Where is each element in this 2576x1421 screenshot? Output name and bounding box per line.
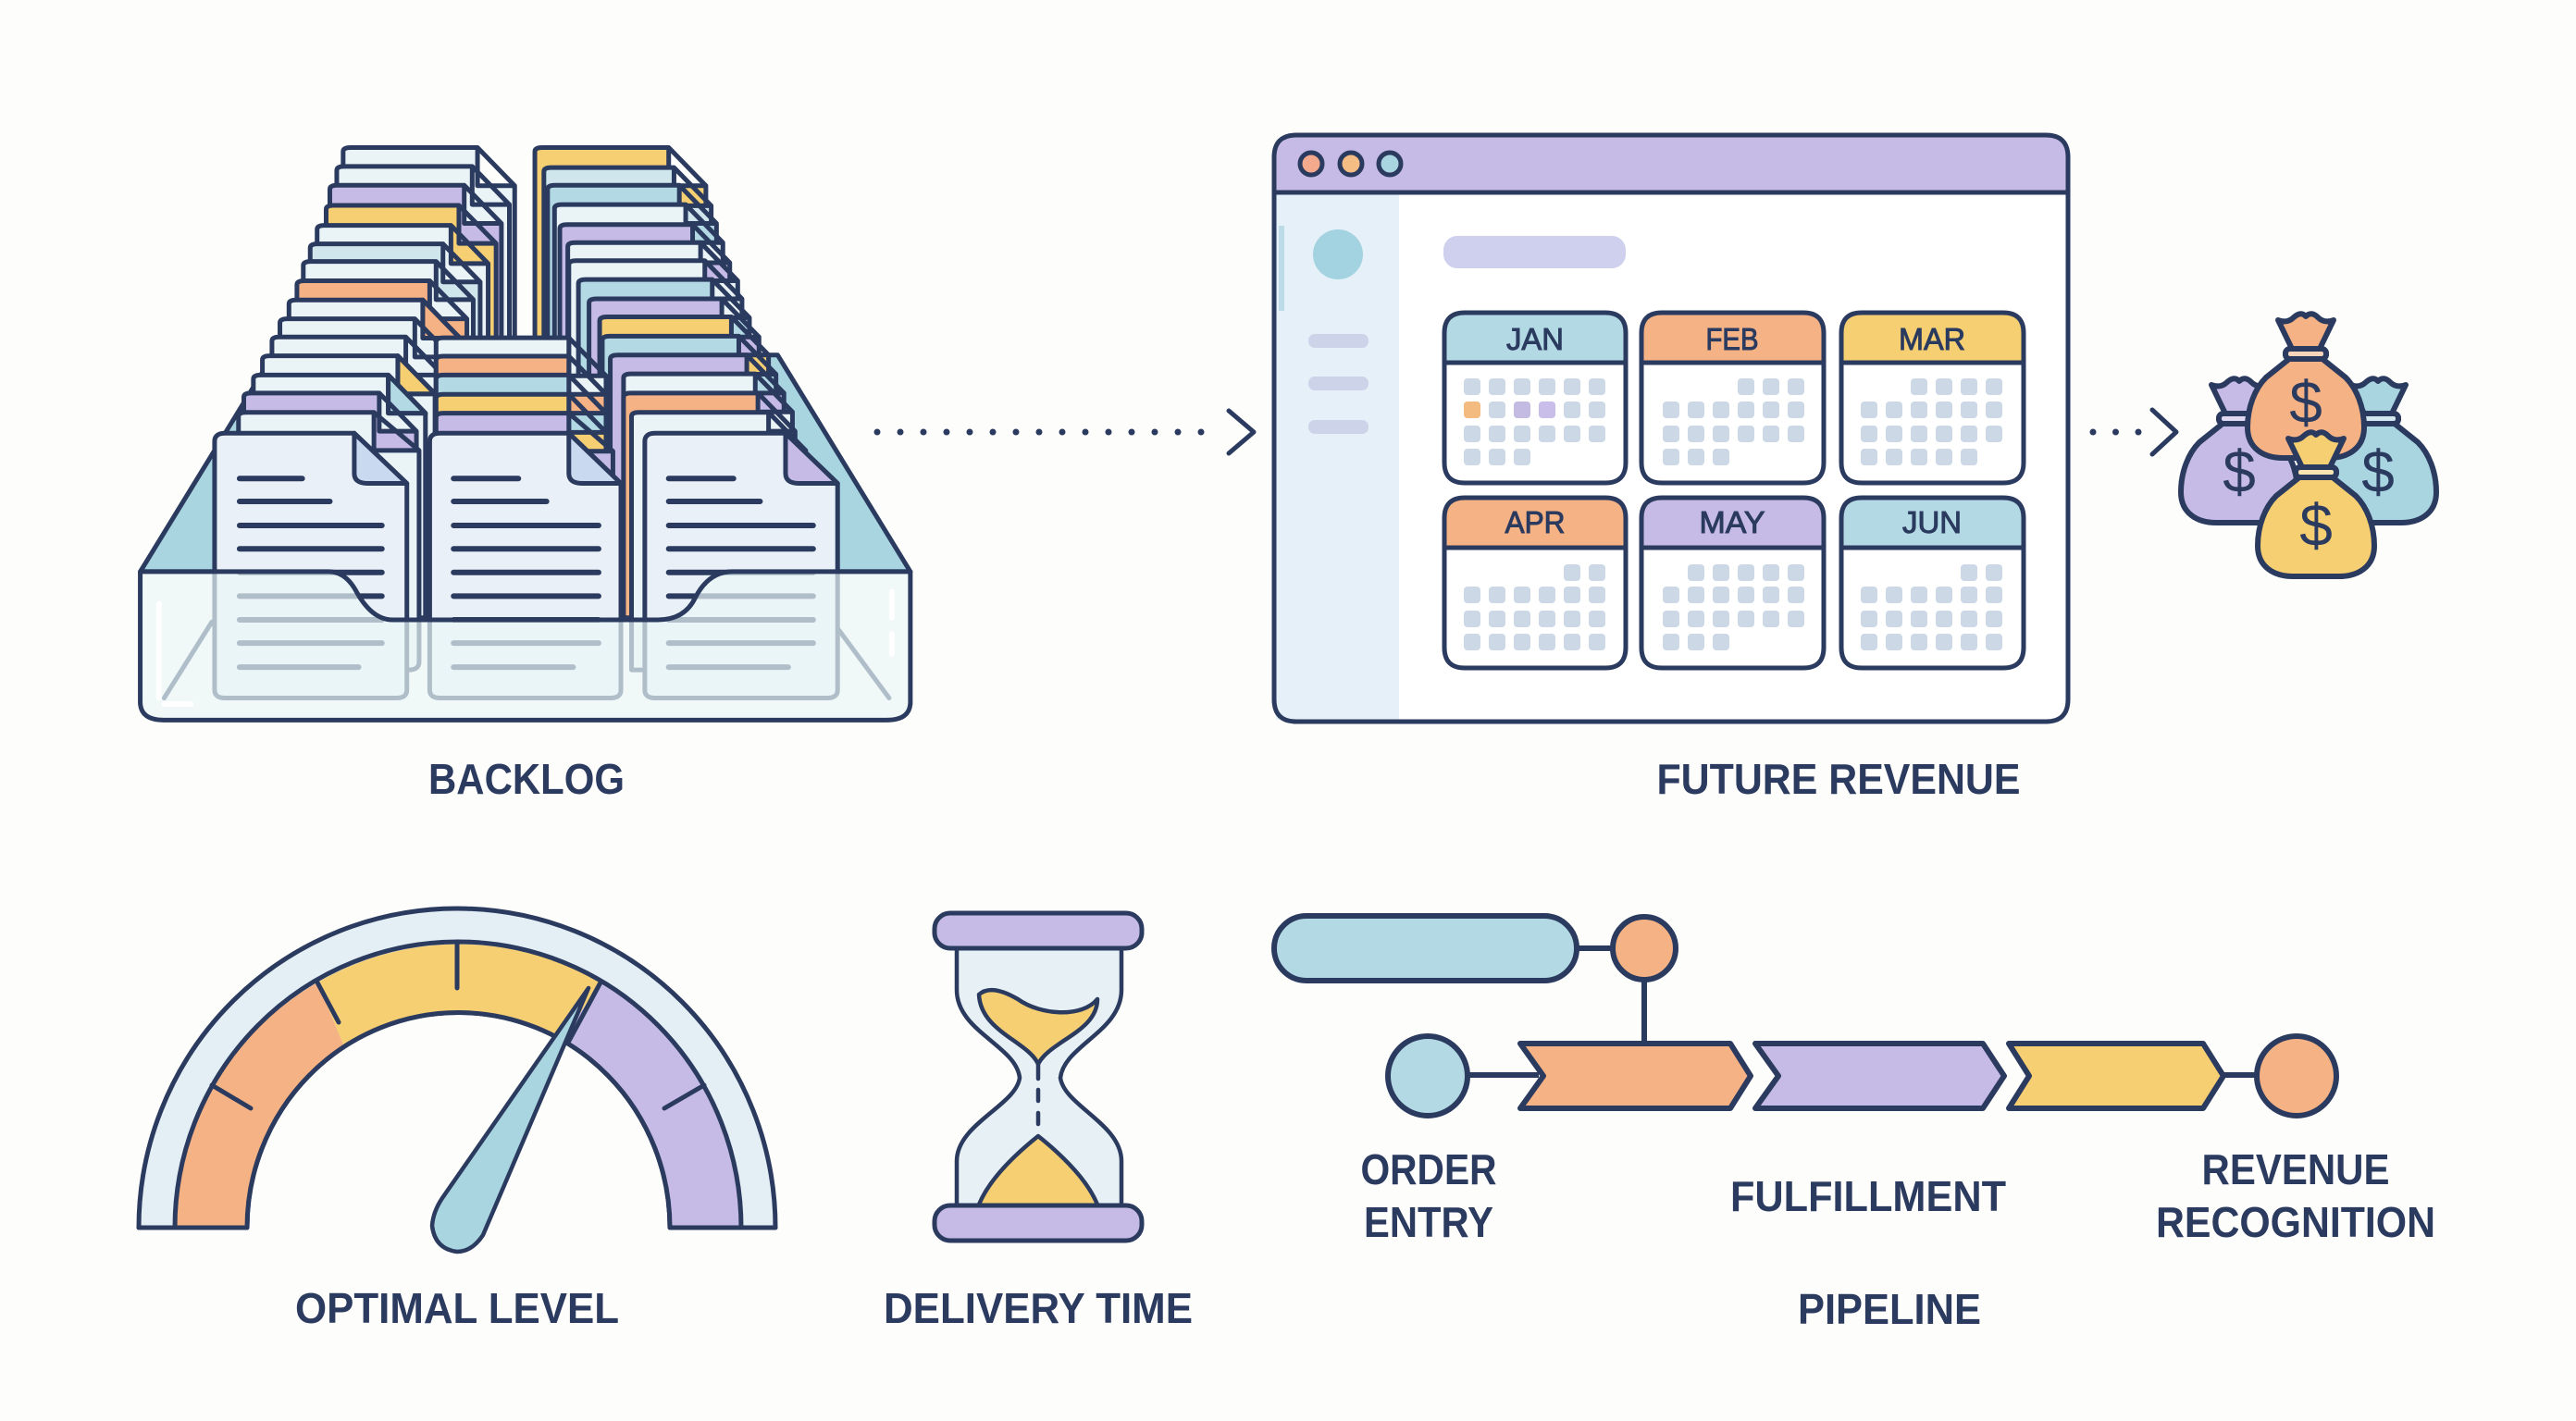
panel: backlog tray with document files [141,147,910,720]
gauge segment: purple [562,982,741,1228]
bag: orange: $ [2289,369,2322,436]
chevron: purple [1755,1044,2004,1108]
arrow: revenue to money bags [2093,410,2176,454]
bag: yellow [2258,432,2374,576]
window controls [1300,153,1401,175]
sidebar [1276,192,1399,720]
calendar: APR: APR [1505,505,1566,539]
document: left [215,433,407,698]
gauge segment: yellow [317,945,601,1046]
inner tray floor lines [164,622,889,698]
bottom cap [935,1205,1142,1241]
label: delivery time: DELIVERY TIME [884,1284,1193,1332]
bottom sand [979,1136,1097,1205]
falling sand [979,1064,1097,1205]
label: revenue: REVENUE [2202,1145,2389,1193]
chevron: orange [1520,1044,1751,1108]
window body [1274,135,2068,722]
document: middle [429,433,621,698]
top node [1613,917,1676,980]
label: optimal level: OPTIMAL LEVEL [295,1284,619,1332]
bag: purple [2181,378,2297,523]
middle file stack [436,338,613,618]
bag: purple: $ [2223,439,2256,505]
label: future revenue: FUTURE REVENUE [1656,755,2021,803]
connectors [1467,948,2256,1075]
diagram: pipeline flow [1274,916,2336,1116]
label: order entry: ORDER [1360,1145,1497,1193]
calendar: JAN: JAN [1506,322,1564,356]
icon: money bags [2181,314,2436,576]
calendar: FEB [1641,313,1824,483]
arrow: backlog to revenue [877,411,1254,453]
gauge needle [432,988,588,1252]
calendar: MAR [1841,313,2024,483]
left file stack [239,147,514,670]
calendar: JUN: JUN [1902,505,1962,539]
document: right [645,433,837,698]
glass [957,948,1121,1205]
calendar: JAN [1444,313,1626,483]
top pill [1274,916,1577,981]
tray back panel [141,355,910,572]
gauge segment: orange [175,982,344,1228]
calendar: MAY: MAY [1699,505,1765,539]
icon: hourglass [935,913,1142,1241]
revenue node [2257,1036,2336,1116]
heading placeholder [1443,236,1626,268]
bag: teal: $ [2361,439,2395,505]
calendar: APR [1444,498,1626,668]
gauge outlines and ticks [139,942,775,1228]
window outline [1274,135,2068,722]
right file stack [535,147,806,670]
label: backlog: BACKLOG [428,755,625,803]
tray glass front [141,572,910,720]
order entry node [1388,1036,1468,1116]
top cap [935,913,1142,948]
label: order entry second line: ENTRY [1364,1198,1493,1246]
calendar: MAY [1641,498,1824,668]
gauge outer band [139,908,775,1228]
chevron: yellow [2009,1044,2223,1108]
gauge: optimal level [139,908,775,1252]
title bar [1274,135,2068,192]
bag: yellow: $ [2299,492,2333,559]
top sand [979,990,1097,1064]
glass highlights [159,592,892,704]
calendar: FEB: FEB [1706,322,1758,356]
bag: orange [2248,314,2364,458]
label: fulfillment: FULFILLMENT [1730,1172,2006,1220]
calendar: JUN [1841,498,2024,668]
panel: browser window with calendars [1274,135,2068,722]
label: recognition: RECOGNITION [2156,1198,2435,1246]
bag: teal [2320,378,2436,523]
calendar: MAR: MAR [1899,322,1965,356]
label: pipeline: PIPELINE [1798,1285,1981,1333]
